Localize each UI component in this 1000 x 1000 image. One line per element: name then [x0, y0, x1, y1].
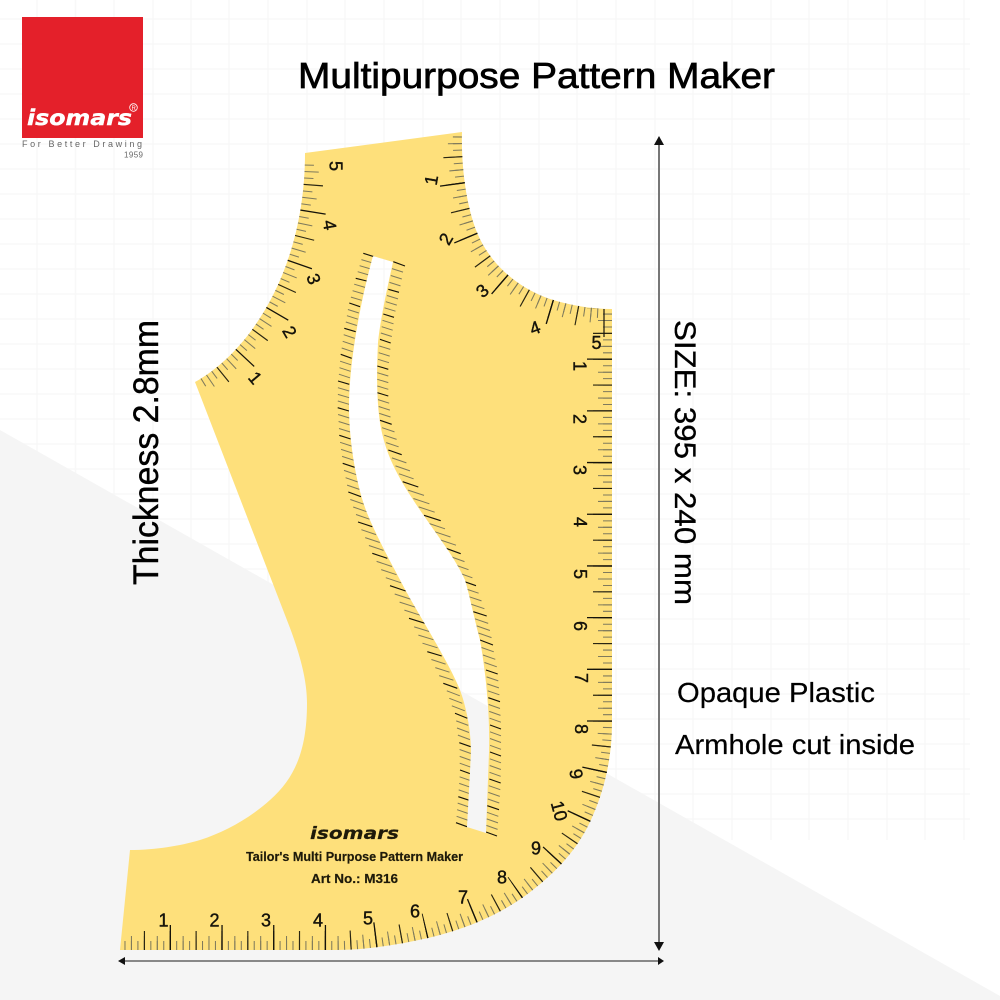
ruler numbers: 5 [363, 908, 373, 928]
ruler numbers: 3 [472, 280, 493, 302]
ruler numbers: 2 [209, 910, 220, 930]
ruler brand and product text [246, 824, 463, 886]
ruler numbers: 9 [531, 838, 541, 858]
ruler numbers: 8 [571, 724, 591, 734]
ruler numbers: 2 [278, 323, 301, 341]
ruler brand and product text: Art No.: M316 [311, 871, 398, 886]
ruler numbers: 7 [458, 888, 468, 908]
ruler numbers: 5 [591, 333, 602, 353]
ruler numbers [158, 161, 602, 930]
ruler numbers: 10 [547, 799, 571, 823]
ruler numbers: 3 [302, 271, 325, 287]
ruler numbers: 1 [158, 910, 169, 930]
armhole label: Armhole cut inside [675, 729, 915, 760]
pattern maker ruler [118, 130, 612, 950]
logo: isomars: 1959 [124, 150, 144, 160]
ruler numbers: 6 [410, 902, 420, 922]
ruler numbers: 4 [527, 317, 543, 339]
ruler numbers: 5 [326, 161, 346, 171]
ruler numbers: 3 [261, 910, 271, 930]
arrow: width dimension [118, 957, 664, 965]
thickness label: Thickness 2.8mm [127, 320, 166, 585]
logo: isomars: isomars [27, 106, 132, 130]
ruler brand and product text: Tailor's Multi Purpose Pattern Maker [246, 850, 463, 864]
title: Multipurpose Pattern Maker [298, 55, 775, 96]
ruler numbers: 2 [435, 230, 457, 248]
ruler numbers: 9 [565, 768, 587, 780]
ruler numbers: 1 [244, 368, 266, 388]
logo: isomars: R [132, 106, 136, 112]
logo: isomars: For Better Drawing [22, 139, 142, 149]
ruler numbers: 3 [570, 465, 590, 475]
tick marks: armhole slot [338, 253, 501, 836]
ruler body [120, 132, 612, 950]
ruler numbers: 5 [570, 569, 590, 579]
ruler numbers: 4 [319, 218, 340, 232]
logo: isomars [22, 17, 144, 160]
size label: SIZE: 395 x 240 mm [668, 320, 701, 605]
ruler numbers: 4 [570, 517, 590, 527]
arrow: height dimension [654, 136, 664, 951]
ruler numbers: 2 [570, 414, 590, 424]
ruler numbers: 1 [570, 361, 590, 371]
ruler numbers: 8 [497, 868, 507, 888]
ruler numbers: 4 [313, 910, 323, 930]
ruler brand and product text: isomars [310, 824, 399, 844]
ruler numbers: 7 [571, 673, 591, 683]
ruler numbers: 6 [570, 621, 590, 631]
ruler numbers: 1 [421, 173, 442, 187]
material label: Opaque Plastic [677, 677, 875, 708]
tick marks: outer edges [118, 130, 612, 950]
